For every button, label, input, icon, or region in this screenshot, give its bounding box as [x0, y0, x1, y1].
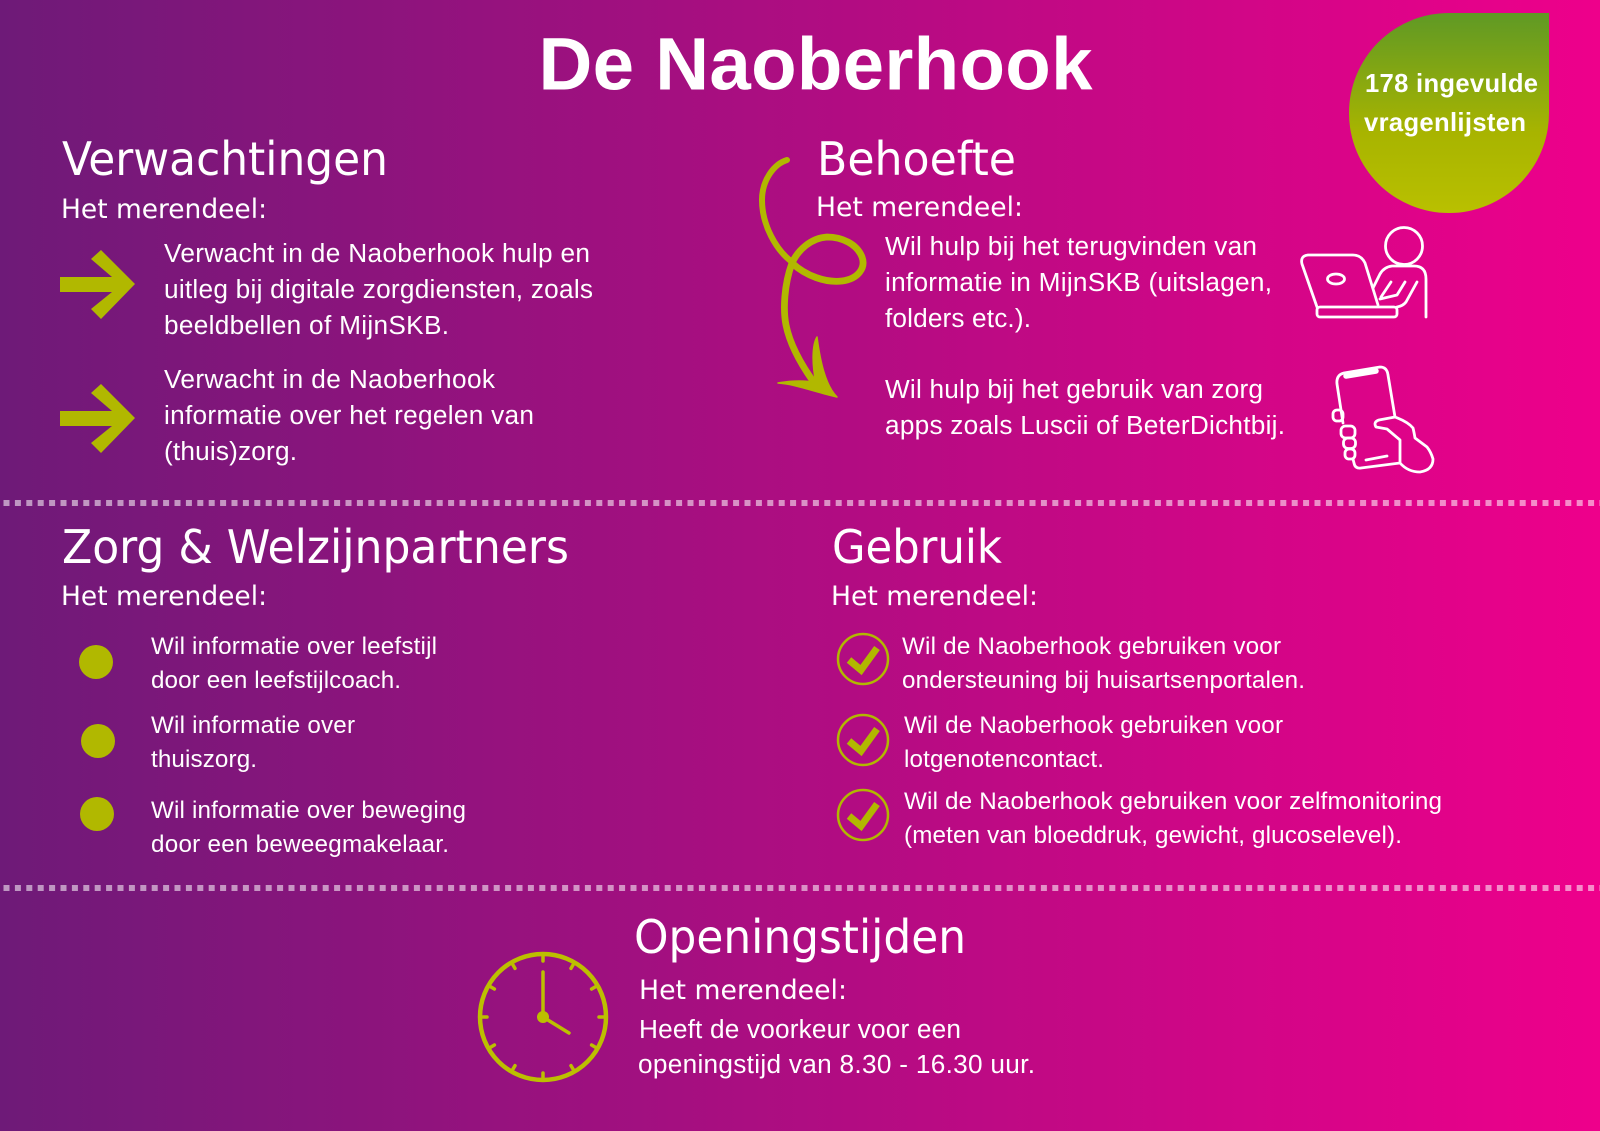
heading: openingstijden: Openingstijden [634, 910, 966, 964]
text: gebruik 2: Wil de Naoberhook gebruiken voor [904, 712, 1283, 739]
text: behoefte 1: informatie in MijnSKB (uitslagen, [885, 267, 1272, 297]
text: gebruik 3: (meten van bloeddruk, gewicht, glucoselevel). [904, 822, 1402, 849]
icon: check 2 [838, 715, 888, 765]
text: verwachting 1 [164, 238, 593, 340]
text: thuiszorg: thuiszorg. [151, 746, 257, 773]
text: leefstijl: Wil informatie over leefstijl [151, 633, 437, 660]
badge: 178 ingevulde vragenlijsten [1349, 13, 1549, 213]
text: behoefte 1: Wil hulp bij het terugvinden van [885, 231, 1257, 261]
text: behoefte 1 [885, 231, 1272, 333]
text: verwachting 1: beeldbellen of MijnSKB. [164, 310, 449, 340]
text: behoefte 2 [885, 374, 1285, 440]
text: thuiszorg: Wil informatie over [151, 712, 355, 739]
text: behoefte 2: apps zoals Luscii of BeterDichtbij. [885, 410, 1285, 440]
text: openingstijd: openingstijd van 8.30 - 16.30 uur. [638, 1049, 1035, 1079]
icon: check 1 [838, 634, 888, 684]
text: behoefte 1: folders etc.). [885, 303, 1031, 333]
title: De Naoberhook [538, 22, 1093, 106]
text: thuiszorg [151, 712, 355, 773]
bullet 2 [81, 724, 115, 758]
text: gebruik 1: Wil de Naoberhook gebruiken voor [902, 633, 1281, 660]
text: leefstijl [151, 633, 437, 694]
icon: hand holding phone [1333, 367, 1433, 472]
bullet 1 [79, 645, 113, 679]
heading: zorg en welzijnpartners: Zorg & Welzijnpartners [62, 520, 569, 574]
subheading: verwachtingen: Het merendeel: [61, 194, 267, 225]
icon: check 3 [838, 790, 888, 840]
text: openingstijd [638, 1014, 1035, 1079]
text: verwachting 2: informatie over het regelen van [164, 400, 534, 430]
text: gebruik 3: Wil de Naoberhook gebruiken voor zelfmonitoring [904, 788, 1442, 815]
text: verwachting 1: uitleg bij digitale zorgdiensten, zoals [164, 274, 593, 304]
panel: verwachtingen [60, 132, 593, 466]
text: gebruik 1 [902, 633, 1305, 694]
panel: openingstijden [480, 910, 1035, 1080]
text: verwachting 2: (thuis)zorg. [164, 436, 297, 466]
heading: gebruik: Gebruik [832, 520, 1002, 574]
heading: behoefte: Behoefte [817, 132, 1016, 186]
panel: gebruik [831, 520, 1442, 849]
panel: zorg en welzijnpartners [61, 520, 569, 858]
icon: swirl arrow [762, 160, 863, 397]
text: verwachting 2 [164, 364, 534, 466]
text: gebruik 2: lotgenotencontact. [904, 746, 1104, 773]
text: beweging: Wil informatie over beweging [151, 797, 466, 824]
text: gebruik 1: ondersteuning bij huisartsenportalen. [902, 667, 1305, 694]
text: behoefte 2: Wil hulp bij het gebruik van zorg [885, 374, 1263, 404]
text: beweging: door een beweegmakelaar. [151, 831, 449, 858]
icon: arrow 1 [60, 250, 135, 319]
text: gebruik 2 [904, 712, 1283, 773]
bullet 3 [80, 797, 114, 831]
subheading: behoefte: Het merendeel: [816, 192, 1023, 223]
icon: person with laptop [1302, 228, 1426, 317]
panel: behoefte [762, 132, 1433, 472]
text: beweging [151, 797, 466, 858]
icon: arrow 2 [60, 384, 135, 453]
icon: clock [480, 954, 606, 1080]
text: gebruik 3 [904, 788, 1442, 849]
subheading: zorg en welzijnpartners: Het merendeel: [61, 581, 267, 612]
badge: 178 ingevulde vragenlijsten: vragenlijsten [1364, 109, 1526, 137]
text: verwachting 1: Verwacht in de Naoberhook hulp en [164, 238, 590, 268]
text: leefstijl: door een leefstijlcoach. [151, 667, 401, 694]
heading: verwachtingen: Verwachtingen [62, 132, 388, 186]
text: verwachting 2: Verwacht in de Naoberhook [164, 364, 496, 394]
badge: 178 ingevulde vragenlijsten: 178 ingevulde [1365, 70, 1538, 98]
subheading: gebruik: Het merendeel: [831, 581, 1038, 612]
text: openingstijd: Heeft de voorkeur voor een [639, 1014, 961, 1044]
subheading: openingstijden: Het merendeel: [639, 975, 847, 1006]
